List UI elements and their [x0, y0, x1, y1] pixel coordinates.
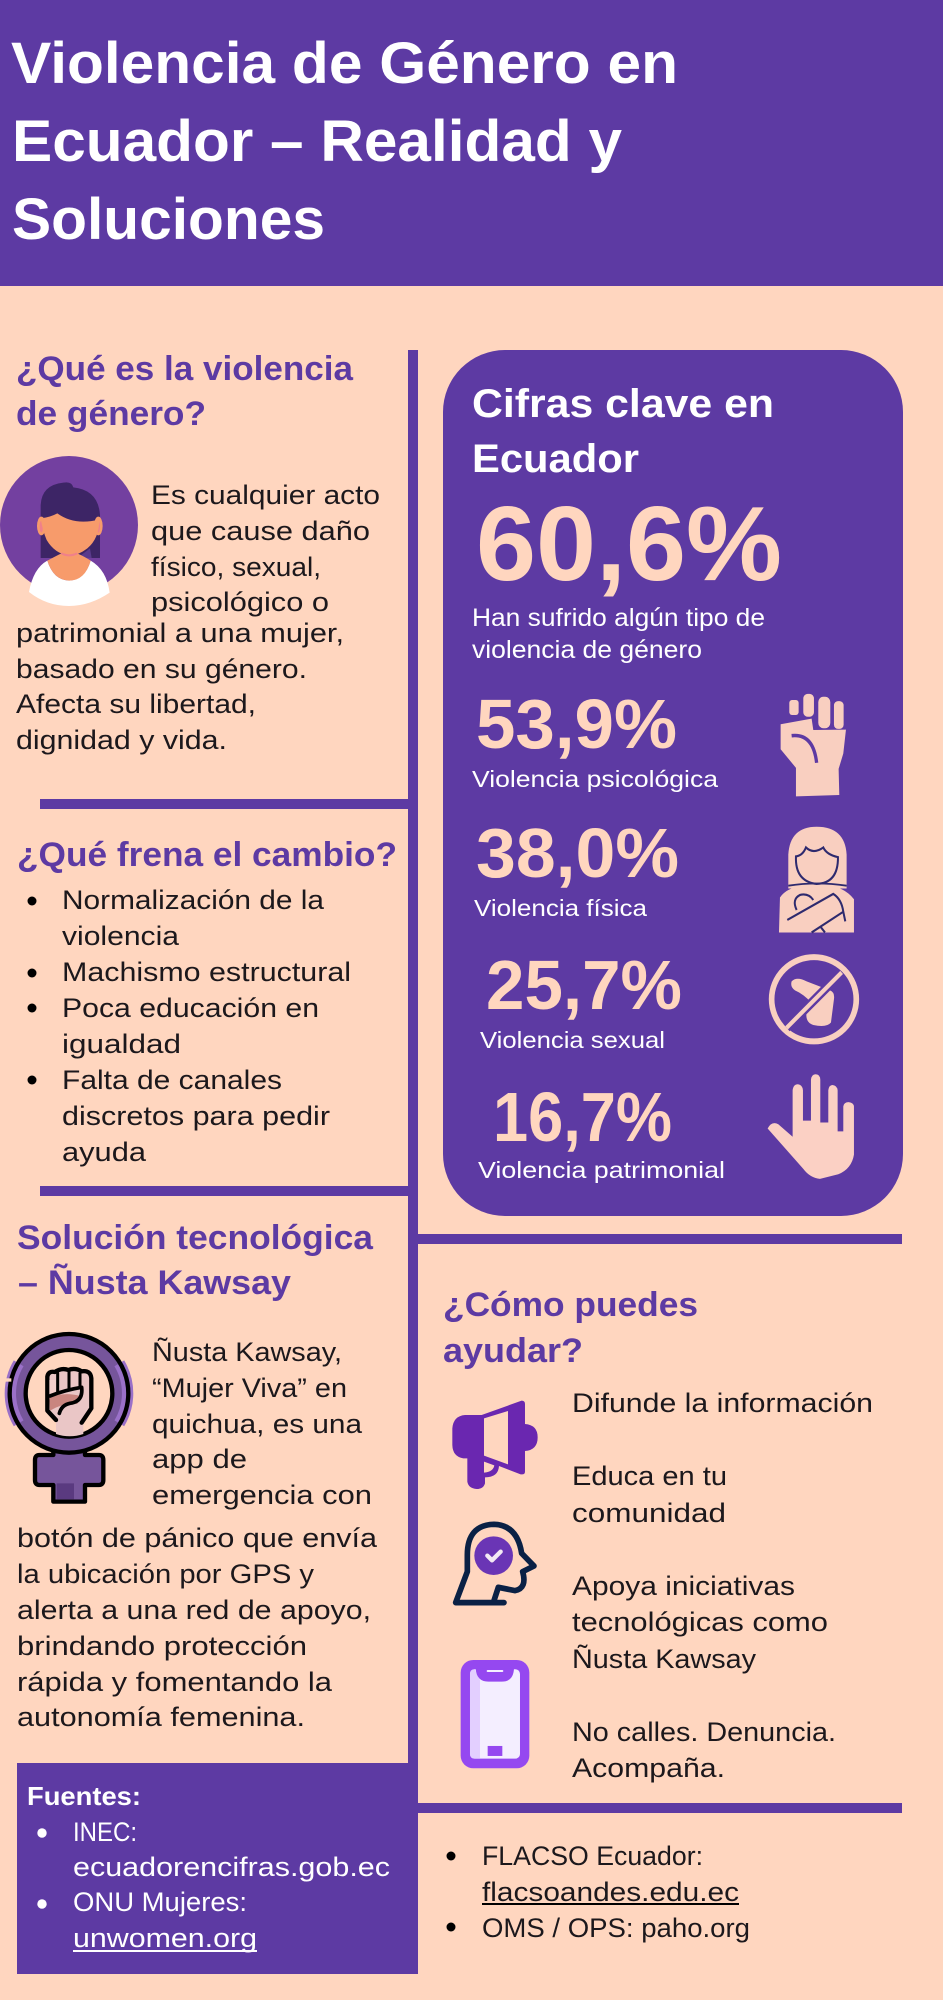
text block: actions: Acompaña. — [572, 1753, 725, 1783]
bullet list: barriers: Poca educación en — [62, 993, 319, 1023]
heading: que es: de género? — [16, 395, 206, 433]
text block: definition: Es cualquier acto — [151, 480, 380, 510]
text block: definition: psicológico o — [151, 587, 329, 617]
text block: app description — [17, 1336, 378, 1732]
text block: app description: “Mujer Viva” en — [152, 1373, 347, 1403]
text block: definition: dignidad y vida. — [16, 725, 227, 755]
header banner — [0, 0, 943, 286]
source list left — [37, 1817, 390, 1953]
panel: que es la violencia de genero — [0, 350, 380, 755]
stat: violencia psicologica — [472, 685, 719, 792]
heading: que es — [16, 350, 354, 433]
text block: definition: que cause daño — [151, 516, 370, 546]
text block: app description: autonomía femenina. — [17, 1702, 305, 1732]
icon: smartphone — [461, 1660, 529, 1768]
heading: cifras clave: Cifras clave en — [472, 382, 774, 426]
source list right — [446, 1841, 750, 1943]
text block: app description: Ñusta Kawsay, — [152, 1336, 342, 1367]
bullet list: barriers: Machismo estructural — [62, 957, 351, 987]
text block: actions: Difunde la información — [572, 1388, 873, 1418]
big stat: 60,6%: violencia de género — [472, 636, 702, 664]
text block: definition: basado en su género. — [16, 654, 307, 684]
icon: head with check — [456, 1524, 534, 1603]
title: Soluciones — [12, 187, 325, 252]
text block: app description: rápida y fomentando la — [17, 1667, 333, 1697]
panel: que frena el cambio — [17, 836, 397, 1167]
heading: como puedes ayudar — [443, 1286, 698, 1370]
text block: actions: No calles. Denuncia. — [572, 1717, 836, 1747]
panel: cifras clave — [443, 350, 903, 1216]
stat: violencia sexual: Violencia sexual — [480, 1027, 665, 1053]
text block: definition: Afecta su libertad, — [16, 689, 256, 719]
icon: woman crossing arms — [779, 827, 854, 932]
stat: violencia patrimonial: Violencia patrimonial — [478, 1157, 725, 1183]
source list left: INEC: — [73, 1817, 137, 1847]
bullet list: barriers: discretos para pedir — [62, 1101, 330, 1131]
heading: cifras clave — [472, 382, 774, 481]
heading: solucion — [17, 1219, 374, 1302]
text block: definition — [16, 480, 380, 755]
text block: actions — [572, 1388, 873, 1783]
text block: actions: comunidad — [572, 1498, 726, 1528]
text block: app description: alerta a una red de apoyo, — [17, 1595, 371, 1625]
stat: violencia psicologica: 53,9% — [476, 685, 677, 763]
heading: cifras clave: Ecuador — [472, 437, 639, 481]
text block: actions: Ñusta Kawsay — [572, 1643, 757, 1674]
big stat: 60,6% — [472, 485, 782, 664]
text block: app description: brindando protección — [17, 1631, 307, 1661]
text block: app description: botón de pánico que envía — [17, 1523, 378, 1553]
heading: como puedes ayudar: ayudar? — [443, 1332, 583, 1370]
stat: violencia sexual: 25,7% — [486, 946, 682, 1024]
source list right: FLACSO Ecuador: — [482, 1841, 703, 1871]
bullet list: barriers: ayuda — [62, 1137, 147, 1167]
stat: violencia fisica: Violencia física — [474, 895, 648, 921]
title: Ecuador – Realidad y — [12, 109, 622, 174]
icon: prohibition sign — [772, 957, 856, 1041]
heading: que es: ¿Qué es la violencia — [16, 350, 354, 388]
icon: female symbol with fist — [5, 1334, 128, 1502]
title — [11, 31, 678, 252]
icon: megaphone — [452, 1401, 538, 1489]
text block: app description: la ubicación por GPS y — [17, 1559, 315, 1589]
text block: actions: Educa en tu — [572, 1461, 727, 1491]
title: Violencia de Género en — [11, 31, 678, 96]
text block: definition: patrimonial a una mujer, — [16, 618, 344, 648]
big stat: 60,6%: 60,6% — [476, 485, 782, 603]
source list right: OMS / OPS: paho.org — [482, 1913, 750, 1943]
heading: que frena: ¿Qué frena el cambio? — [17, 836, 397, 874]
text block: app description: app de — [152, 1444, 247, 1474]
heading: como puedes ayudar: ¿Cómo puedes — [443, 1286, 698, 1324]
bullet list: barriers: Falta de canales — [62, 1065, 282, 1095]
bullet list: barriers — [28, 885, 351, 1167]
icon: woman avatar — [0, 456, 138, 606]
icon: raised fist — [781, 694, 846, 796]
source list left: ONU Mujeres: — [73, 1887, 247, 1917]
panel: solucion tecnologica — [5, 1219, 378, 1732]
heading: solucion: Solución tecnológica — [17, 1219, 374, 1257]
text block: definition: físico, sexual, — [151, 552, 321, 582]
panel: fuentes — [17, 1763, 418, 1974]
icon: stop hand — [768, 1074, 854, 1179]
panel: como puedes ayudar — [443, 1286, 873, 1783]
stat: violencia patrimonial — [478, 1078, 725, 1183]
big stat: 60,6%: Han sufrido algún tipo de — [472, 604, 765, 632]
source list right: flacsoandes.edu.ec — [482, 1877, 739, 1907]
stat: violencia fisica: 38,0% — [476, 814, 679, 892]
heading: solucion: – Ñusta Kawsay — [18, 1264, 291, 1302]
stat: violencia patrimonial: 16,7% — [493, 1078, 672, 1156]
text block: app description: emergencia con — [152, 1480, 372, 1510]
text block: actions: tecnológicas como — [572, 1607, 828, 1637]
source list left: ecuadorencifras.gob.ec — [73, 1852, 390, 1882]
heading: fuentes: Fuentes: — [27, 1781, 141, 1811]
text block: actions: Apoya iniciativas — [572, 1571, 795, 1601]
stat: violencia psicologica: Violencia psicológica — [472, 766, 719, 792]
bullet list: barriers: violencia — [62, 921, 180, 951]
bullet list: barriers: igualdad — [62, 1029, 181, 1059]
bullet list: barriers: Normalización de la — [62, 885, 325, 915]
source list left: unwomen.org — [73, 1923, 257, 1953]
text block: app description: quichua, es una — [152, 1409, 363, 1439]
